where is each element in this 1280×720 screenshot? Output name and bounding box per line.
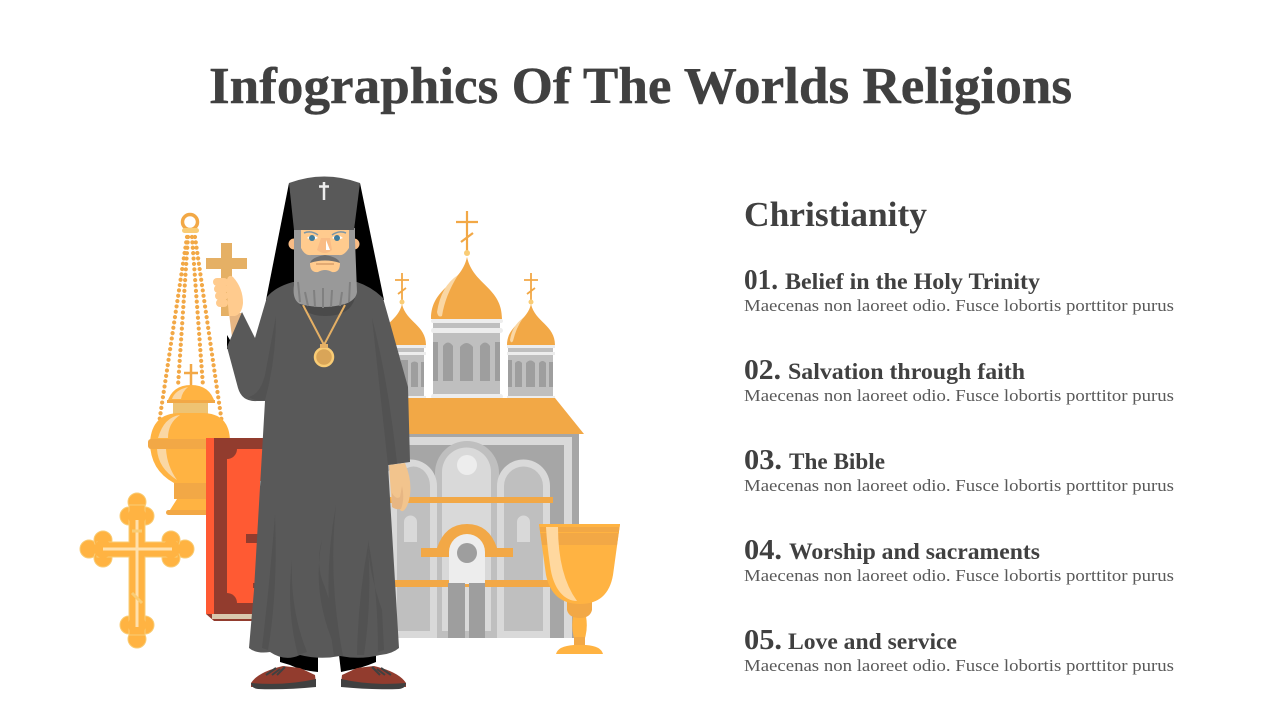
icon: book xyxy=(206,438,280,621)
title: Infographics Of The Worlds Religions xyxy=(209,58,1072,115)
shoes xyxy=(251,666,406,689)
veil xyxy=(266,183,384,300)
robe folds xyxy=(248,316,408,656)
church roof xyxy=(385,398,584,434)
klobuk hat xyxy=(289,176,360,230)
center dome xyxy=(431,211,503,399)
illustration: Christianity scene xyxy=(80,176,620,689)
item 03: The Bible xyxy=(789,449,885,474)
collar xyxy=(297,298,355,316)
item 04 xyxy=(744,535,1174,585)
left shoe xyxy=(251,666,316,689)
item 03 xyxy=(744,445,1174,495)
lower hand xyxy=(389,463,410,511)
item 02: Maecenas non laoreet odio. Fusce lobortis porttitor purus xyxy=(744,386,1174,405)
head xyxy=(288,228,360,308)
item 05: 05. xyxy=(744,625,782,656)
right shoe xyxy=(341,666,406,689)
panel: Christianity list xyxy=(744,195,1174,675)
hand with cross xyxy=(206,243,247,349)
item 02: Salvation through faith xyxy=(788,359,1025,384)
item 05 xyxy=(744,625,1174,675)
item 05: Love and service xyxy=(788,629,957,654)
church body xyxy=(384,434,579,638)
robe xyxy=(227,282,410,658)
hat cross xyxy=(319,182,329,200)
item 01: Belief in the Holy Trinity xyxy=(785,269,1041,294)
icon: censer xyxy=(148,214,230,515)
side dome right xyxy=(507,273,555,399)
pectoral medallion xyxy=(303,305,345,366)
item 04: 04. xyxy=(744,535,782,566)
item 02 xyxy=(744,355,1174,405)
item 01 xyxy=(744,265,1174,315)
item 03: 03. xyxy=(744,445,782,476)
item 05: Maecenas non laoreet odio. Fusce lobortis porttitor purus xyxy=(744,656,1174,675)
item 01: 01. xyxy=(744,265,778,296)
legs xyxy=(280,655,376,672)
icon: orthodox cross xyxy=(80,493,194,648)
item 04: Worship and sacraments xyxy=(789,539,1040,564)
figure: priest xyxy=(206,176,410,689)
icon: church xyxy=(378,211,584,638)
item 01: Maecenas non laoreet odio. Fusce lobortis porttitor purus xyxy=(744,296,1174,315)
item 04: Maecenas non laoreet odio. Fusce lobortis porttitor purus xyxy=(744,566,1174,585)
icon: chalice xyxy=(539,524,620,654)
item 03: Maecenas non laoreet odio. Fusce lobortis porttitor purus xyxy=(744,476,1174,495)
side dome left xyxy=(378,273,426,399)
item 02: 02. xyxy=(744,355,781,386)
section heading: Christianity xyxy=(744,195,927,234)
